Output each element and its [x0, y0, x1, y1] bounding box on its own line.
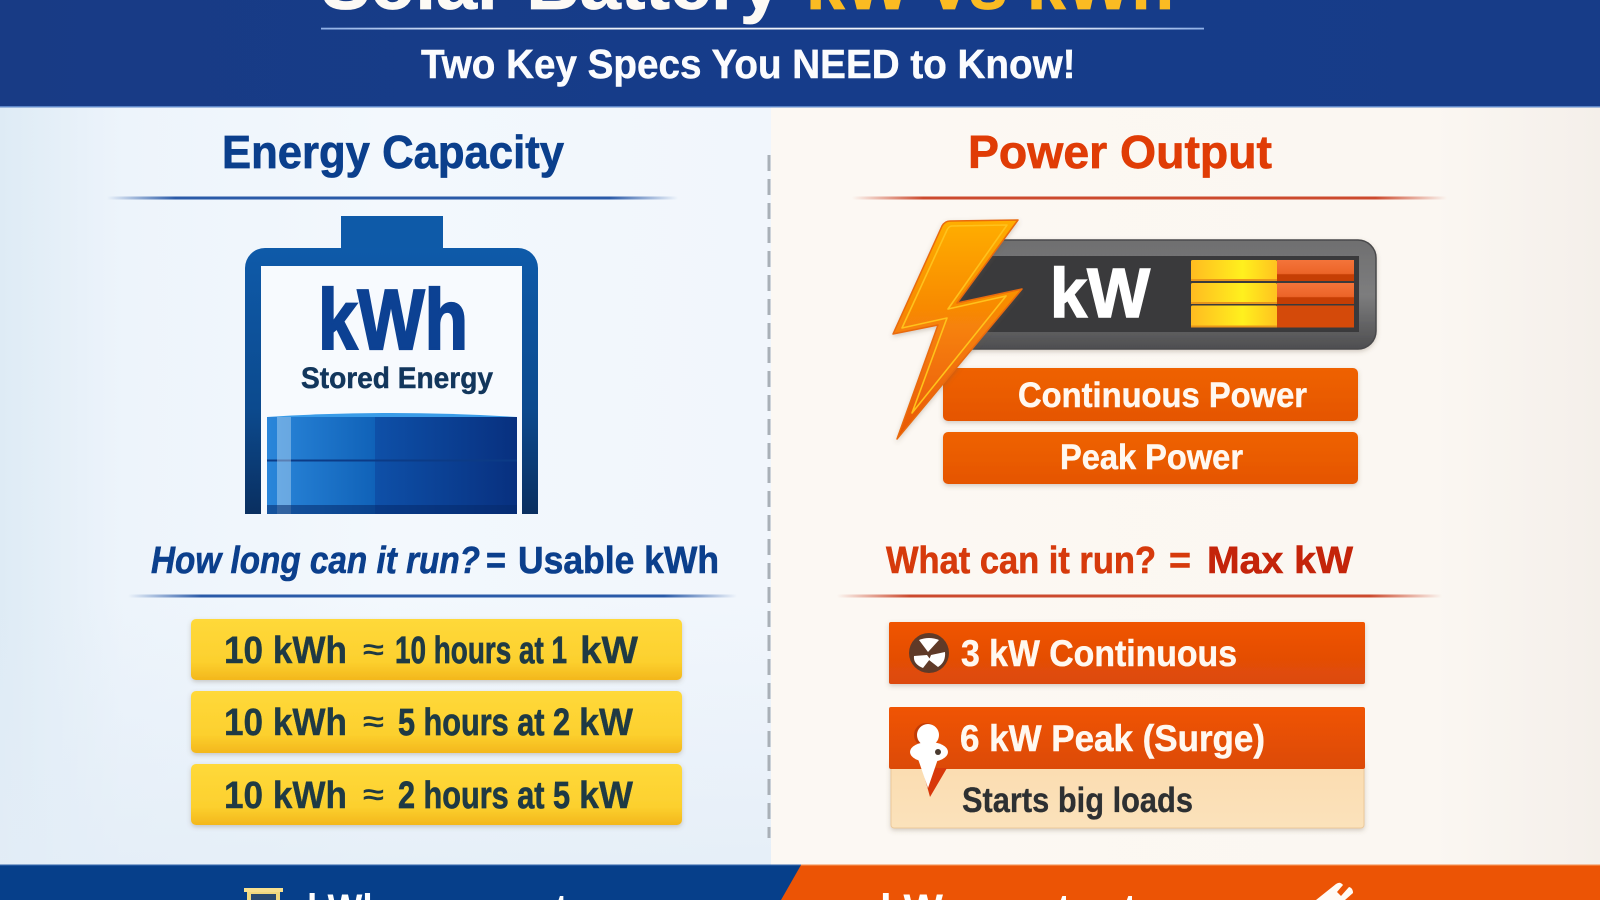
icon: battery kWh: [245, 216, 538, 514]
callout: 3 kW continuous: 3 kW Continuous: [961, 633, 1237, 674]
footer text right: [880, 887, 1137, 900]
runtime row 3: 2 hours at 5: [398, 775, 570, 817]
button: continuous power: [943, 368, 1358, 421]
divider: [768, 155, 770, 838]
question: what can it run: =: [1169, 540, 1191, 582]
button: peak power: [943, 432, 1358, 484]
question: what can it run: [886, 540, 1353, 582]
question: how long: [151, 540, 719, 582]
icon: wrench: [1316, 883, 1353, 900]
question: how long: =: [486, 540, 506, 582]
runtime row 3: ≈: [363, 779, 384, 810]
panel: energy capacity background: [0, 107, 771, 865]
question: what can it run: Max kW: [1207, 540, 1353, 582]
runtime row 2: ≈: [363, 706, 384, 737]
question: what can it run: What can it run?: [886, 540, 1156, 582]
runtime row 3: 10 kWh: [224, 775, 347, 817]
button: continuous power: Continuous Power: [1018, 376, 1307, 415]
title: [321, 0, 1174, 25]
runtime row 3: [191, 764, 682, 825]
panel: power output background: [771, 107, 1600, 865]
runtime row 2: 10 kWh: [224, 702, 347, 744]
battery label stored energy: Stored Energy: [301, 362, 493, 395]
icon: kW power meter: [950, 240, 1376, 349]
meter label kW: kW: [1050, 254, 1150, 332]
question: how long: How long can it run?: [151, 540, 480, 582]
callout: 6 kW peak surge: [889, 707, 1365, 828]
battery label kWh: kWh: [318, 273, 468, 368]
callout: 3 kW continuous: [889, 622, 1365, 684]
footer banner: kWh: [0, 864, 810, 900]
runtime row 2: kW: [579, 702, 633, 744]
runtime row 1: kW: [580, 630, 638, 672]
battery charge fill: [267, 413, 517, 514]
footer banner: kW: [781, 864, 1600, 900]
heading: power output: Power Output: [968, 126, 1272, 178]
icon: lightning bolt: [893, 220, 1022, 439]
button: peak power: Peak Power: [1060, 438, 1243, 477]
runtime row 1: 10 hours at 1: [395, 630, 567, 672]
heading: energy capacity: Energy Capacity: [222, 126, 564, 178]
runtime row 1: [191, 619, 682, 680]
icon: box: [244, 888, 283, 900]
subtitle: Two Key Specs You NEED to Know!: [421, 41, 1076, 87]
header banner: [0, 0, 1600, 108]
question: how long: Usable kWh: [518, 540, 719, 582]
icon: surge pin: [910, 723, 948, 797]
runtime row 3: kW: [579, 775, 633, 817]
runtime row 1: ≈: [363, 634, 384, 665]
runtime row 2: 5 hours at 2: [398, 702, 570, 744]
footer text left: [307, 887, 568, 900]
icon: fan: [909, 633, 949, 673]
note: starts big loads: Starts big loads: [962, 781, 1193, 820]
runtime row 1: 10 kWh: [224, 630, 347, 672]
runtime row 2: [191, 691, 682, 753]
callout: 6 kW peak surge: 6 kW Peak (Surge): [960, 718, 1265, 759]
meter segments: [1191, 260, 1354, 328]
